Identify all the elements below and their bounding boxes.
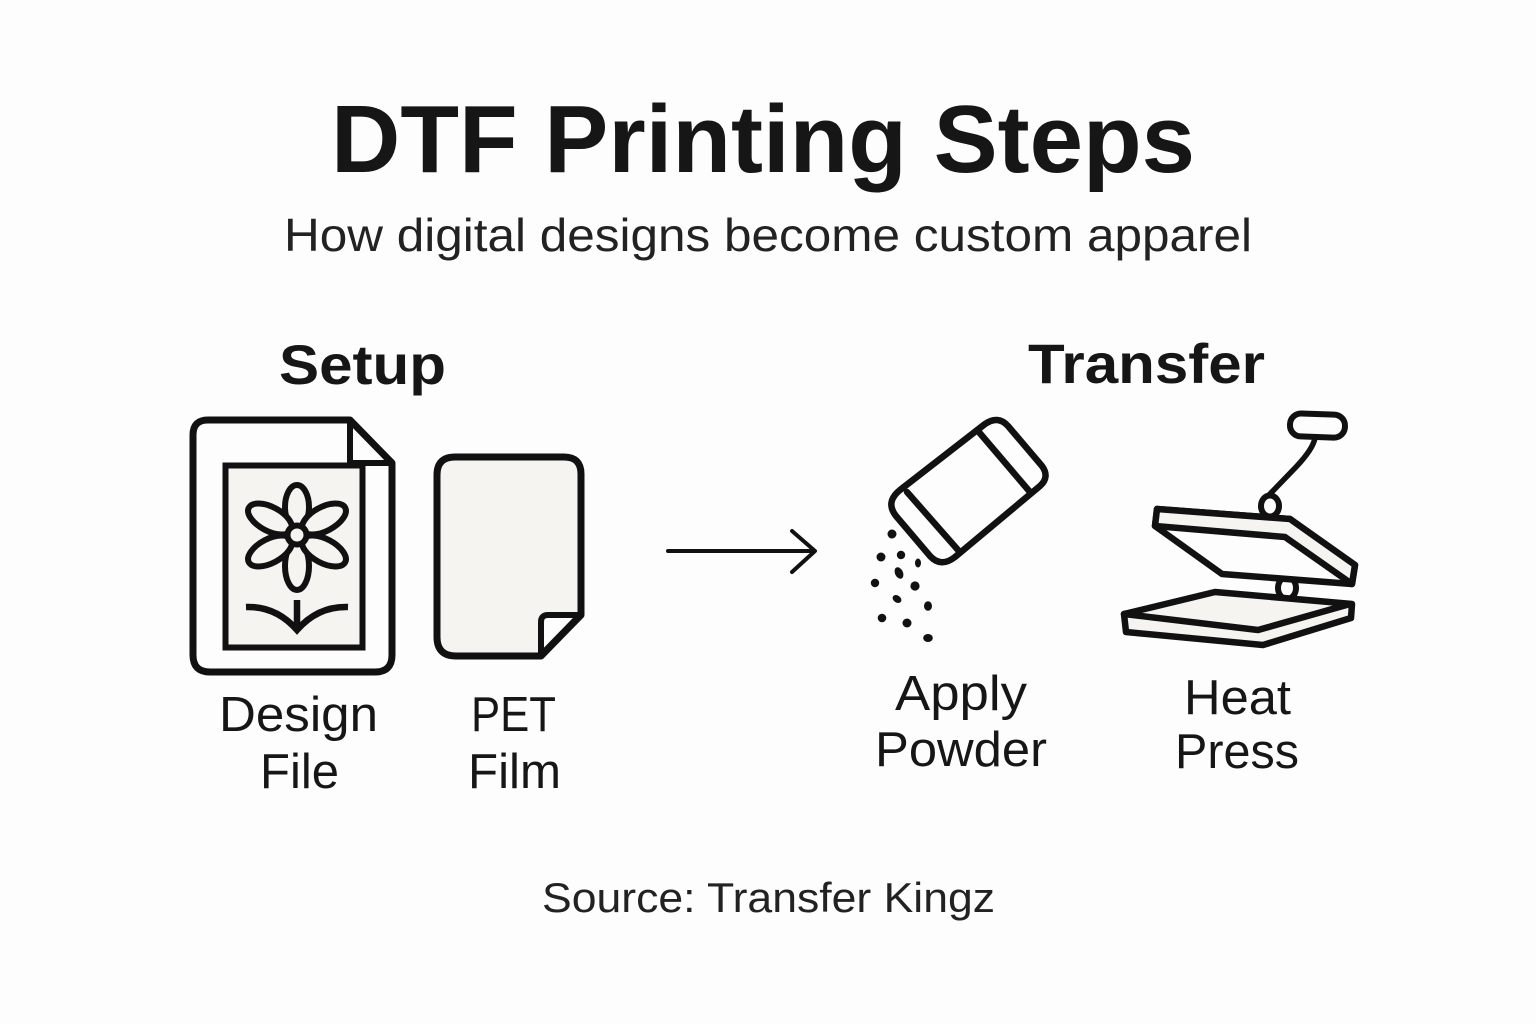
label: Design File: File — [260, 745, 339, 799]
powder particles — [871, 530, 933, 642]
label: PET Film: Film — [468, 745, 561, 799]
heading: Setup: Setup — [279, 333, 446, 396]
label: Apply Powder — [875, 667, 1047, 777]
label: Heat Press: Heat — [1184, 671, 1291, 725]
heading: Transfer: Transfer — [1028, 332, 1265, 395]
icon: PET film — [437, 457, 581, 656]
title: DTF Printing Steps — [331, 86, 1195, 193]
arrow — [668, 531, 815, 572]
label: PET Film — [468, 688, 561, 799]
label: PET Film: PET — [471, 688, 556, 742]
press pivot ring — [1261, 496, 1279, 516]
label: Apply Powder: Powder — [875, 723, 1047, 777]
press handle — [1290, 413, 1345, 438]
label: Heat Press: Press — [1175, 725, 1299, 779]
press lower platen — [1124, 592, 1352, 645]
icon: heat press — [1124, 413, 1355, 645]
subtitle: How digital designs become custom apparel — [284, 209, 1252, 261]
icon: flower — [243, 485, 351, 590]
press upper platen — [1155, 509, 1355, 584]
label: Apply Powder: Apply — [895, 667, 1028, 721]
icon: flower stem and leaves — [246, 600, 348, 630]
press lower pivot — [1278, 577, 1296, 599]
icon: design file — [193, 420, 392, 672]
source note: Source: Transfer Kingz — [542, 874, 995, 921]
press arm — [1268, 438, 1315, 496]
label: Heat Press — [1175, 671, 1299, 779]
label: Design File: Design — [219, 688, 378, 742]
label: Design File — [219, 688, 378, 799]
icon: powder shaker — [871, 420, 1046, 642]
